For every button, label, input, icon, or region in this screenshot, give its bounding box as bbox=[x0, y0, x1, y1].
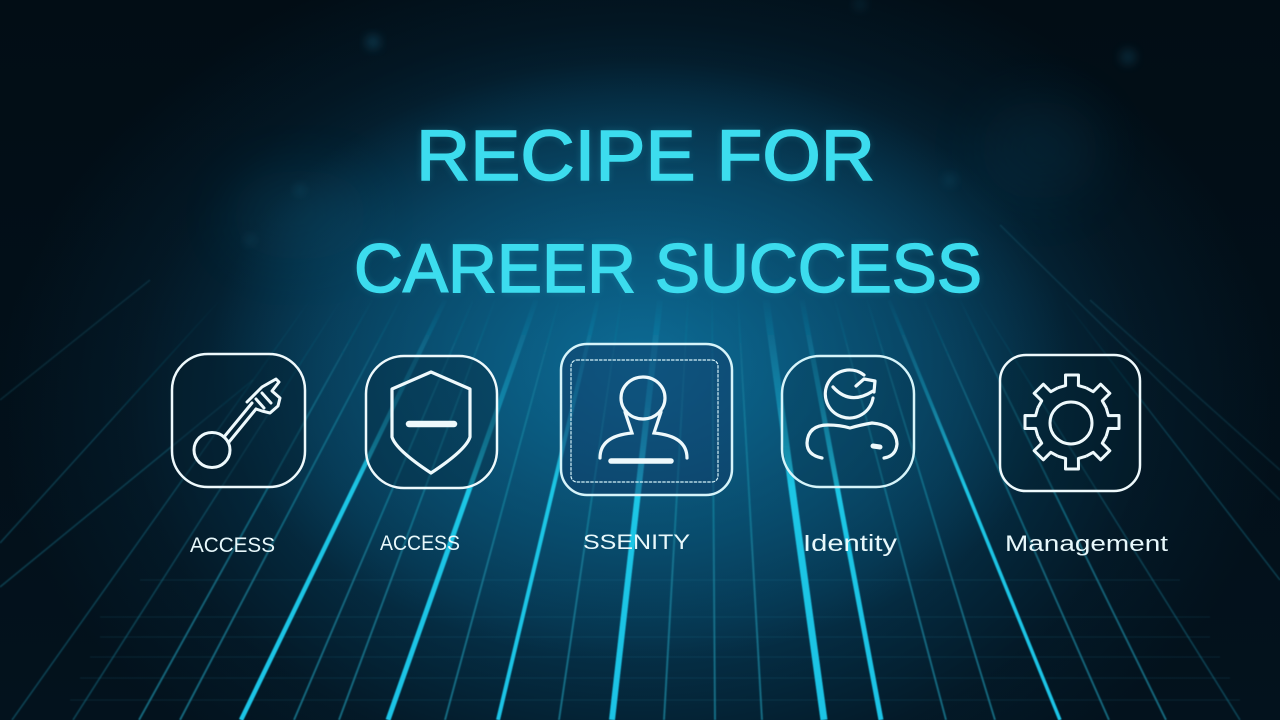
title: RECIPE FOR bbox=[416, 117, 875, 196]
icon: gear bbox=[1000, 355, 1140, 491]
title bbox=[354, 117, 982, 307]
label: security: SSENITY bbox=[583, 531, 690, 554]
icon: key bbox=[172, 354, 305, 487]
title: RECIPE FOR bbox=[416, 117, 875, 196]
icon: shield bbox=[366, 356, 497, 488]
perspective grid bbox=[0, 225, 1280, 720]
label: access second: ACCESS bbox=[380, 532, 460, 555]
label: identity: Identity bbox=[803, 530, 898, 556]
title: CAREER SUCCESS bbox=[354, 230, 982, 307]
label: access: ACCESS bbox=[190, 534, 275, 557]
background bokeh bbox=[230, 0, 1136, 260]
icon: person in dashed frame bbox=[561, 344, 732, 495]
title: CAREER SUCCESS bbox=[354, 230, 982, 307]
icon: identity person bbox=[782, 356, 914, 487]
label: management: Management bbox=[1005, 531, 1169, 556]
